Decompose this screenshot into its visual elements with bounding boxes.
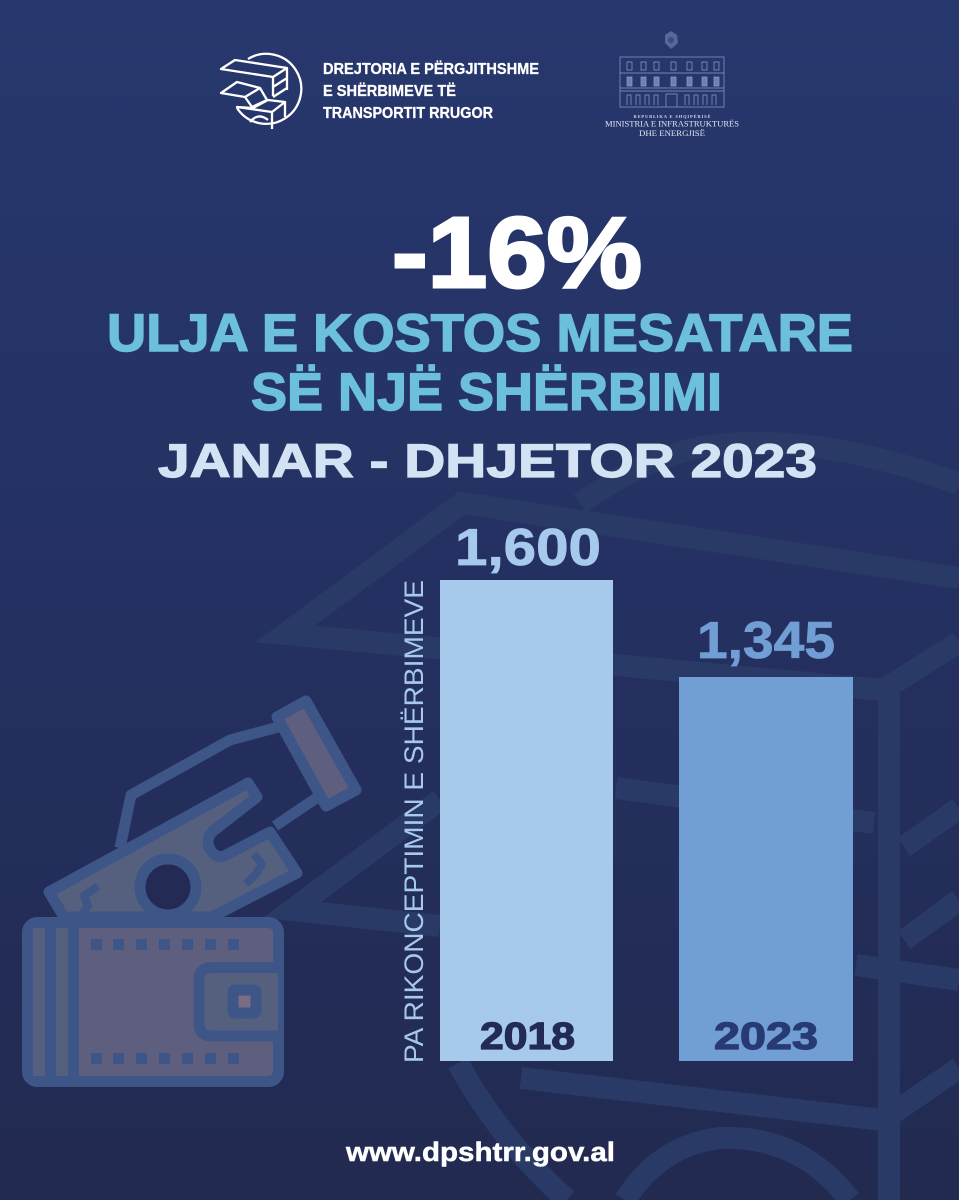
hand outline [120,726,318,848]
wallet body [28,922,278,1082]
watermark: large logo outline [285,443,959,1200]
value: 1,345: 1,345 [697,612,835,670]
banknote [49,783,297,917]
logo text: directorate name [323,61,539,122]
year: 2023: 2023 [714,1016,818,1058]
heading: average cost reduction: ULJA E KOSTOS MESATARE [107,304,853,363]
ministry name: DHE ENERGJISË [639,129,705,138]
bar chart [440,519,853,1061]
wallet stripes [33,928,79,1076]
ministry name [605,114,739,138]
logo text: directorate name: TRANSPORTIT RRUGOR [323,105,493,122]
clasp button [233,990,256,1013]
subheading: period: JANAR - DHJETOR 2023 [158,434,817,487]
ministry building illustration [620,57,724,107]
logo text: directorate name: E SHËRBIMEVE TË [323,83,456,100]
heading: average cost reduction: SË NJË SHËRBIMI [251,363,722,422]
icon: hand putting money in wallet [28,701,356,1082]
banknote hole [140,859,196,915]
ministry name: REPUBLIKA E SHQIPËRISË [634,114,710,119]
cuff [277,701,356,806]
website url: www.dpshtrr.gov.al [345,1137,615,1167]
banknote marks [82,854,262,914]
heading: average cost reduction [107,304,853,422]
bar: 2018 [440,580,613,1061]
wallet clasp [199,968,278,1036]
ministry emblem: eagle crest [665,31,678,49]
logo: DPSHTRR emblem [221,54,301,129]
logo text: directorate name: DREJTORIA E PËRGJITHSHME [323,61,539,78]
ministry name: MINISTRIA E INFRASTRUKTURËS [605,120,739,128]
wallet stitching [91,939,239,1064]
bar: 2023 [679,677,853,1061]
year: 2018: 2018 [480,1016,575,1058]
axis label: PA RIKONCEPTIMIN E SHËRBIMEVE [399,580,429,1063]
headline: -16%: -16% [392,197,642,309]
value: 1,600: 1,600 [455,519,601,577]
